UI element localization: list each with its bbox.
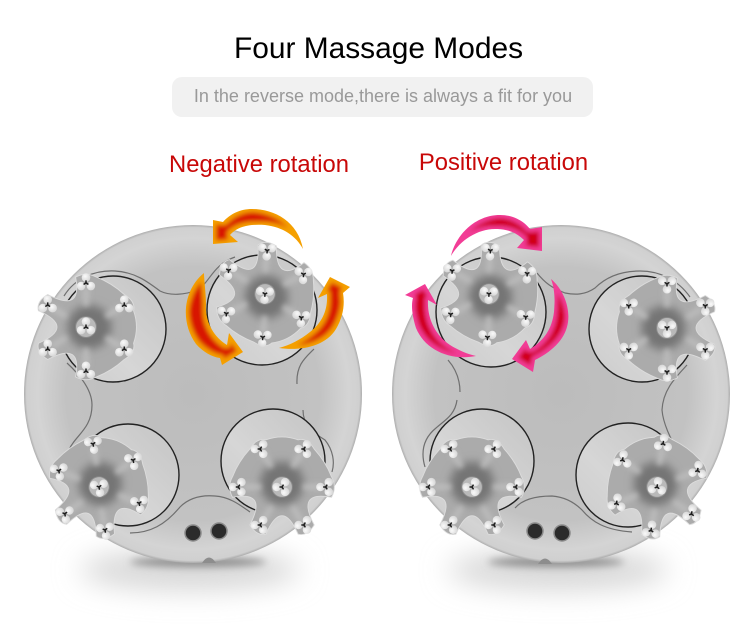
massager: right device bbox=[392, 225, 730, 590]
massage head top right bbox=[197, 228, 335, 362]
socket lower left bbox=[430, 409, 534, 513]
heading: positive rotation: Positive rotation bbox=[419, 149, 588, 176]
massage head upper left bbox=[38, 273, 136, 380]
massage head lower left bbox=[419, 437, 524, 535]
arrow: negative left bbox=[186, 273, 243, 365]
socket lower right bbox=[576, 423, 680, 527]
arrow: positive left bbox=[405, 284, 476, 357]
massage head lower right bbox=[589, 421, 723, 551]
buttons bbox=[185, 523, 227, 541]
buttons bbox=[527, 523, 570, 541]
massage head lower left bbox=[32, 421, 166, 550]
heading: negative rotation: Negative rotation bbox=[169, 151, 349, 178]
arrow: negative right bbox=[279, 277, 350, 349]
socket lower left bbox=[77, 424, 179, 526]
device body bbox=[392, 225, 730, 563]
socket lower right bbox=[221, 409, 325, 513]
groove lines bbox=[64, 257, 333, 533]
device body bbox=[24, 225, 362, 563]
massage head upper right bbox=[617, 275, 715, 382]
socket upper right bbox=[589, 276, 695, 382]
arrow: negative top bbox=[213, 209, 303, 249]
subtitle pill bbox=[172, 77, 593, 117]
massage head lower right bbox=[229, 437, 334, 535]
floor shadow bbox=[448, 550, 668, 590]
massage head top left bbox=[421, 228, 559, 362]
subtitle pill: In the reverse mode,there is always a fit for you bbox=[194, 86, 572, 106]
socket top left bbox=[436, 257, 546, 367]
arrow: positive top bbox=[451, 215, 542, 256]
socket top right bbox=[207, 255, 317, 365]
notch bbox=[538, 558, 552, 564]
floor shadow bbox=[80, 550, 300, 590]
groove lines bbox=[423, 271, 690, 532]
socket upper left bbox=[60, 276, 166, 382]
notch bbox=[202, 558, 216, 563]
arrow: positive right bbox=[512, 279, 568, 372]
title: Four Massage Modes bbox=[234, 32, 523, 65]
massager: left device bbox=[24, 225, 362, 590]
